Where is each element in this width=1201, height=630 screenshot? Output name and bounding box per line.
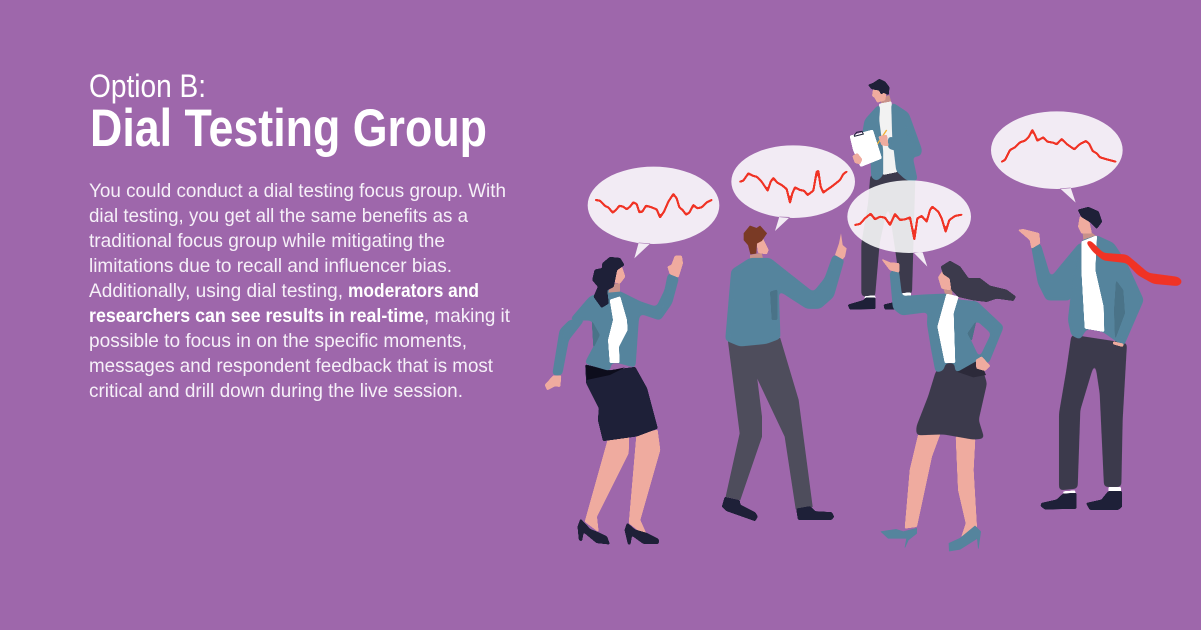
woman upper body <box>882 259 1016 372</box>
speech bubble: red tie man <box>991 111 1123 203</box>
title block <box>89 68 487 158</box>
heading: option label: Option B: <box>89 68 206 104</box>
body text block: You could conduct a dial testing focus group. With <box>89 180 506 202</box>
speech bubble: pointing man <box>731 145 855 231</box>
figure: man with red tie <box>1018 207 1182 509</box>
figure: man pointing, brown hair <box>722 226 847 521</box>
figure: woman with raised hand, left <box>545 256 683 544</box>
body text block: messages and respondent feedback that is most <box>89 355 494 377</box>
heading: dial testing group: Dial Testing Group <box>90 99 487 158</box>
figure: woman with long hair <box>881 359 987 551</box>
body text block: possible to focus in on the specific moments, <box>89 330 467 352</box>
body text block: researchers can see results in real-time <box>89 305 424 327</box>
body text block: Additionally, using dial testing, <box>89 280 343 302</box>
body text block: moderators and <box>348 280 479 302</box>
body text block: traditional focus group while mitigating the <box>89 230 445 252</box>
body text block: dial testing, you get all the same benefits as a <box>89 205 468 227</box>
body text block: , making it <box>424 305 511 327</box>
speech bubble: left woman <box>588 167 719 258</box>
body text block: limitations due to recall and influencer bias. <box>89 255 452 277</box>
speech bubble: long-hair woman <box>847 180 971 267</box>
figure: man with clipboard <box>848 79 922 309</box>
body text block <box>89 180 511 402</box>
body text block: critical and drill down during the live session. <box>89 380 463 402</box>
red tie <box>1086 241 1182 286</box>
